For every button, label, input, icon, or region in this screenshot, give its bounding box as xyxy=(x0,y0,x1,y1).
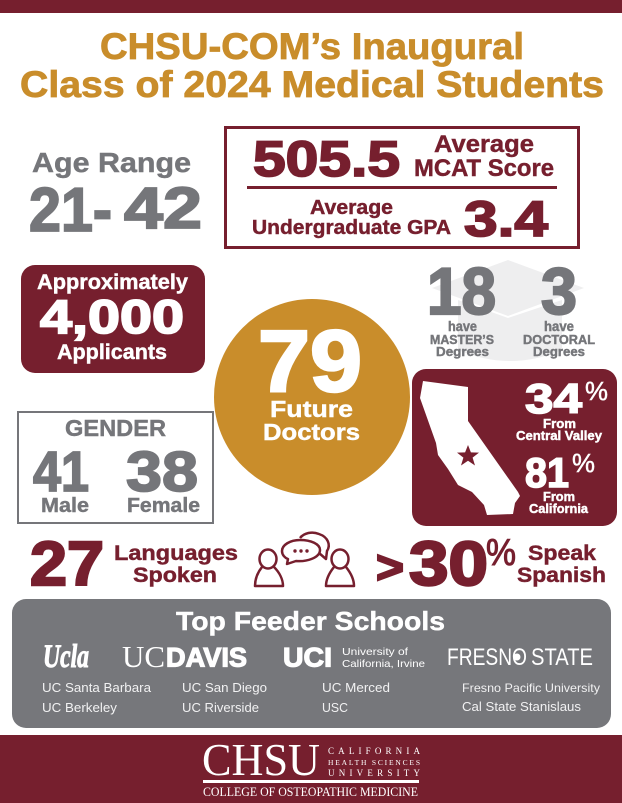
logo: CHSU: HEALTH SCIENCES xyxy=(328,758,420,767)
age range: 42 xyxy=(124,176,202,241)
footer xyxy=(0,735,622,803)
doctoral degrees: Degrees xyxy=(533,344,585,359)
doctoral degrees: DOCTORAL xyxy=(523,332,595,347)
panel: gender: Female xyxy=(127,495,200,517)
logo: Fresno State: FRESNO xyxy=(447,644,527,671)
icon: star xyxy=(457,445,479,466)
spanish stat xyxy=(376,530,606,599)
school list: UC Berkeley xyxy=(42,701,118,715)
panel: gender: 38 xyxy=(126,440,198,504)
spanish stat: 30 xyxy=(409,530,488,599)
MCAT score: 505.5 xyxy=(253,131,400,187)
school list: UC Merced xyxy=(322,681,390,695)
spanish stat: Speak xyxy=(528,542,596,565)
master's degrees: have xyxy=(448,318,477,334)
MCAT label: MCAT Score xyxy=(414,155,554,182)
circle: future doctors xyxy=(214,299,410,495)
circle: future doctors: Future xyxy=(270,396,353,422)
master's degrees: 18 xyxy=(427,254,496,328)
school list: Fresno Pacific University xyxy=(462,681,600,695)
panel: gender: GENDER xyxy=(65,415,166,441)
panel: applicants xyxy=(21,265,205,373)
logo: Fresno State xyxy=(447,644,593,671)
panel: MCAT and GPA xyxy=(226,128,578,248)
stat: california: From xyxy=(543,489,575,504)
master's degrees: Degrees xyxy=(436,344,489,359)
panel: applicants: 4,000 xyxy=(40,290,184,343)
panel: top feeder schools xyxy=(12,599,611,728)
panel: California origins xyxy=(412,369,617,526)
languages stat: Spoken xyxy=(133,564,217,587)
school list: UC Santa Barbara xyxy=(42,681,151,695)
panel: gender: Male xyxy=(41,495,89,517)
logo: Fresno State: STATE xyxy=(531,644,593,671)
age range: 21- xyxy=(29,176,112,245)
GPA label xyxy=(252,197,451,239)
title: Class of 2024 Medical Students xyxy=(20,64,604,105)
spanish stat: Spanish xyxy=(517,564,606,587)
panel: gender: 41 xyxy=(33,440,89,504)
GPA value: 3.4 xyxy=(464,191,548,247)
school list: UC San Diego xyxy=(182,681,267,695)
doctoral degrees xyxy=(523,254,595,359)
title xyxy=(20,26,604,105)
logo: UC Davis: UC xyxy=(122,639,165,674)
panel: applicants: Approximately xyxy=(37,271,188,294)
top bar xyxy=(0,0,622,13)
logo: UC Irvine: UCI xyxy=(283,642,332,672)
logo: UCLA: Ucla xyxy=(43,639,89,675)
circle: future doctors: 79 xyxy=(258,313,362,410)
stat: central valley xyxy=(516,375,608,443)
icon: people talking xyxy=(255,533,354,586)
master's degrees xyxy=(427,254,496,359)
logo: UC Irvine: University of xyxy=(342,646,408,658)
doctoral degrees: 3 xyxy=(541,254,577,328)
MCAT label: Average xyxy=(434,131,534,158)
stat: california: 81 xyxy=(525,449,569,496)
age range: Age Range xyxy=(32,147,191,178)
school list xyxy=(42,681,600,715)
logo: CHSU: COLLEGE OF OSTEOPATHIC MEDICINE xyxy=(203,785,418,799)
school list: Cal State Stanislaus xyxy=(462,700,581,714)
stat: central valley: % xyxy=(585,376,608,406)
spanish stat: % xyxy=(486,532,516,573)
logo: UC Irvine xyxy=(283,642,425,672)
icon: graduation cap xyxy=(432,260,584,361)
age range xyxy=(29,147,202,245)
master's degrees: MASTER’S xyxy=(430,332,494,347)
icon: California map xyxy=(420,381,520,515)
title: CHSU-COM’s Inaugural xyxy=(100,26,524,67)
doctoral degrees: have xyxy=(544,318,574,334)
languages stat: Languages xyxy=(114,542,238,565)
stat: california: % xyxy=(572,448,595,478)
stat: california: California xyxy=(529,501,589,516)
logo: CHSU: UNIVERSITY xyxy=(328,768,420,778)
spanish stat: > xyxy=(376,541,404,593)
heading: Top Feeder Schools xyxy=(176,606,445,636)
logo: CHSU xyxy=(202,734,420,799)
panel: gender xyxy=(18,412,213,523)
logo: UC Davis: DAVIS xyxy=(166,642,247,672)
logo: UC Davis xyxy=(122,639,247,674)
stat: central valley: Central Valley xyxy=(516,428,603,443)
logo: CHSU: CALIFORNIA xyxy=(328,746,420,756)
languages stat xyxy=(30,530,238,599)
GPA label: Undergraduate GPA xyxy=(252,217,451,239)
MCAT label xyxy=(414,131,554,182)
school list: USC xyxy=(322,701,348,715)
logo: UC Irvine: California, Irvine xyxy=(342,658,425,670)
panel: applicants: Applicants xyxy=(57,341,167,364)
GPA label: Average xyxy=(310,197,393,219)
stat: central valley: 34 xyxy=(525,375,583,422)
logo: CHSU: CHSU xyxy=(202,734,320,785)
languages stat: 27 xyxy=(30,530,104,599)
school list: UC Riverside xyxy=(182,701,259,715)
circle: future doctors: Doctors xyxy=(263,419,360,445)
stat: central valley: From xyxy=(543,416,576,431)
stat: california xyxy=(525,448,595,516)
